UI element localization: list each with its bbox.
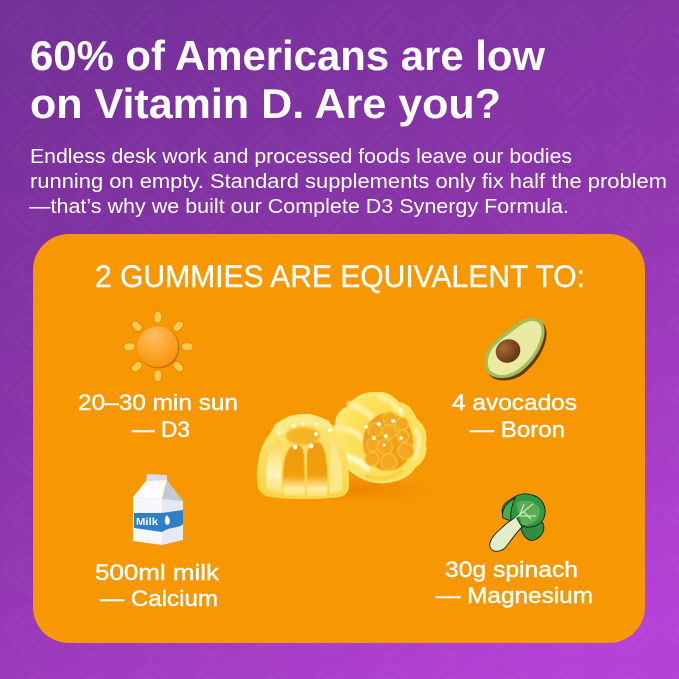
label: spinach: [436, 557, 593, 608]
label: milk: 500ml milk: [95, 560, 220, 585]
title: [30, 32, 545, 127]
icon: spinach: [490, 494, 545, 551]
title: 60% of Americans are low: [30, 32, 545, 79]
label: milk: [95, 560, 220, 611]
icon: milk carton: Milk: [136, 517, 158, 528]
label: spinach: — Magnesium: [436, 583, 593, 608]
intro text: [29, 145, 667, 218]
intro text: —that’s why we built our Complete D3 Synergy Formula.: [29, 195, 569, 218]
panel heading: 2 GUMMIES ARE EQUIVALENT TO:: [95, 258, 585, 294]
gummy: right raspberry: [334, 392, 427, 483]
label: spinach: 30g spinach: [445, 557, 578, 582]
label: avocado: 4 avocados: [452, 390, 577, 415]
panel background: [33, 234, 645, 643]
gummies illustration: [257, 392, 433, 503]
title: on Vitamin D. Are you?: [30, 80, 501, 127]
panel: gummies equivalence: [33, 234, 645, 643]
intro text: Endless desk work and processed foods leave our bodies: [30, 145, 572, 168]
gummy: left jelly: [257, 414, 349, 499]
label: sun: — D3: [132, 417, 190, 442]
gummy shadow: [257, 477, 433, 503]
label: milk: — Calcium: [100, 586, 218, 611]
icon: avocado: [485, 318, 547, 381]
label: sun: 20–30 min sun: [78, 390, 238, 415]
intro text: running on empty. Standard supplements only fix half the problem: [30, 170, 667, 193]
icon: milk carton: [133, 474, 183, 545]
label: sun: [78, 390, 238, 442]
icon: sun: [124, 312, 193, 382]
label: avocado: — Boron: [470, 417, 565, 442]
label: avocado: [452, 390, 577, 442]
